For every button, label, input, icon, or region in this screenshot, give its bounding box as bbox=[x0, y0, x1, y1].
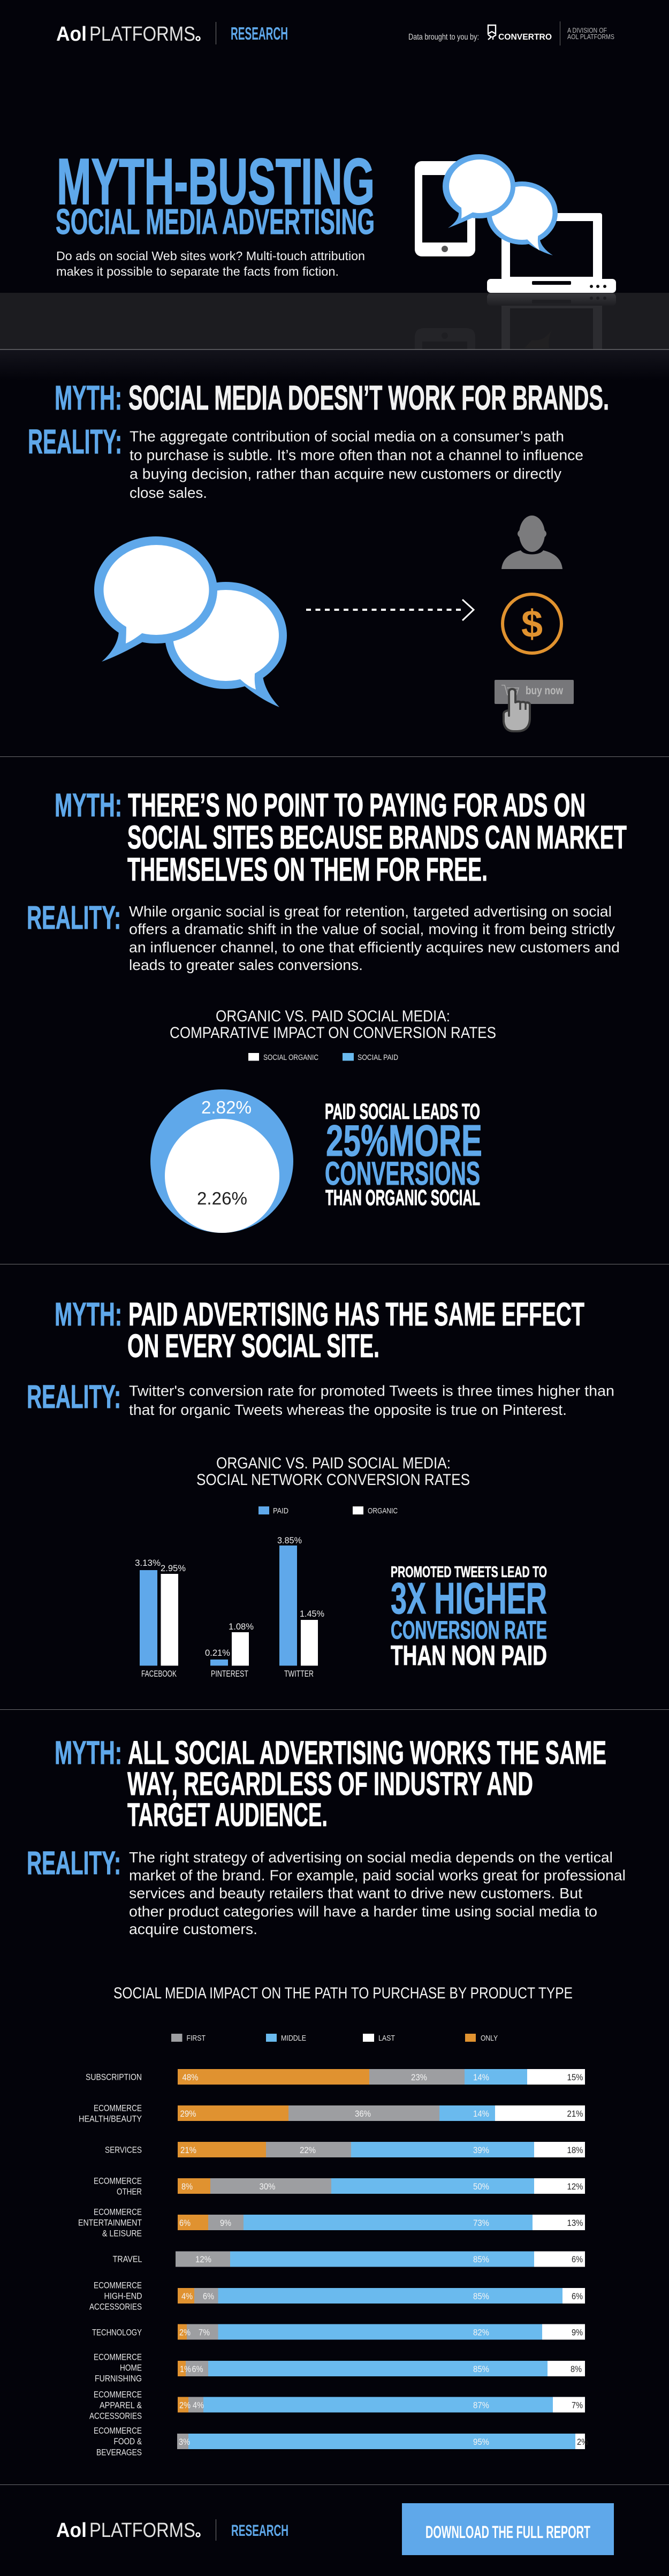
row: home furnishing: FURNISHING bbox=[95, 2374, 142, 2383]
group: pinterest: 0.21% bbox=[205, 1648, 230, 1658]
legend: FIRST bbox=[186, 2034, 206, 2043]
row: travel: TRAVEL bbox=[112, 2254, 142, 2264]
row: subscription: SUBSCRIPTION bbox=[86, 2072, 142, 2082]
row: high-end accessories bbox=[89, 2280, 585, 2312]
row: ecommerce other: 30% bbox=[259, 2181, 275, 2192]
row: travel: 6% bbox=[572, 2254, 583, 2264]
icon: dollar coin bbox=[503, 594, 561, 653]
chart: nested circles: 2.82% bbox=[201, 1097, 252, 1117]
arrow: dotted bbox=[306, 600, 474, 620]
icon: person bbox=[501, 516, 562, 569]
row: high-end accessories: ECOMMERCE bbox=[94, 2280, 142, 2290]
division note: AOL PLATFORMS bbox=[567, 33, 614, 41]
logo: Aol Platforms: PLATFORMS bbox=[89, 2519, 195, 2542]
icon: buy now button bbox=[495, 680, 574, 731]
research label: RESEARCH bbox=[231, 2522, 288, 2540]
row: home furnishing: 8% bbox=[571, 2364, 582, 2374]
panel: myth 4 bbox=[27, 1734, 626, 2457]
reality 3 text: Twitter's conversion rate for promoted Tweets is three times higher than bbox=[129, 1382, 614, 1399]
row: home furnishing: 6% bbox=[192, 2364, 203, 2374]
legend: SOCIAL ORGANIC bbox=[263, 1053, 318, 1062]
icon: dollar coin: $ bbox=[521, 603, 543, 646]
legend: SOCIAL PAID bbox=[358, 1053, 398, 1062]
reality 4 text: REALITY: bbox=[27, 1845, 121, 1881]
group: twitter: 1.45% bbox=[300, 1609, 324, 1619]
chart title bbox=[170, 1007, 496, 1042]
legend: ORGANIC bbox=[368, 1506, 398, 1516]
row: food and beverages: FOOD & bbox=[113, 2436, 142, 2446]
chart title: SOCIAL NETWORK CONVERSION RATES bbox=[196, 1471, 470, 1489]
row: high-end accessories: 4% bbox=[181, 2291, 193, 2301]
row: food and beverages: 2% bbox=[577, 2437, 588, 2447]
row: ecommerce other bbox=[94, 2176, 585, 2197]
group: facebook: 3.13% bbox=[135, 1558, 161, 1568]
row: technology: 9% bbox=[572, 2328, 583, 2337]
group: facebook: 2.95% bbox=[161, 1563, 186, 1573]
title bbox=[56, 145, 375, 242]
legend bbox=[259, 1506, 398, 1516]
reality 1 text: close sales. bbox=[130, 484, 207, 501]
myth 3 heading: MYTH: bbox=[55, 1296, 122, 1332]
row: technology: 7% bbox=[199, 2328, 210, 2337]
chart title: SOCIAL MEDIA IMPACT ON THE PATH TO PURCHASE BY PRODUCT TYPE bbox=[113, 1984, 573, 2002]
panel: myth 2 bbox=[27, 787, 627, 1233]
callout: paid social: PAID SOCIAL LEADS TO bbox=[325, 1099, 480, 1124]
row: travel: 12% bbox=[195, 2254, 211, 2264]
icon: laptop bbox=[487, 213, 616, 293]
row: entertainment and leisure: ENTERTAINMENT bbox=[78, 2217, 142, 2228]
legend: PAID bbox=[273, 1506, 288, 1516]
row: apparel and accessories: ECOMMERCE bbox=[94, 2390, 142, 2399]
logo: Aol Platforms: PLATFORMS bbox=[89, 23, 195, 46]
row: services: 18% bbox=[567, 2145, 583, 2155]
reality 2 text: offers a dramatic shift in the value of social, moving it from being strictly bbox=[129, 921, 615, 937]
icon: large speech bubbles bbox=[94, 536, 287, 707]
reality 4 text: market of the brand. For example, paid social works great for professional bbox=[129, 1867, 626, 1883]
divider line bbox=[0, 2484, 669, 2485]
logo: Convertro: CONVERTRO bbox=[498, 33, 552, 42]
reality 2 text: an influencer channel, to one that efficiently acquires new customers and bbox=[129, 939, 620, 956]
row: apparel and accessories: 2% bbox=[179, 2400, 191, 2410]
title: MYTH-BUSTING bbox=[57, 145, 375, 218]
download button bbox=[402, 2503, 614, 2555]
callout: promoted tweets: 3X HIGHER bbox=[391, 1573, 547, 1623]
chart title: COMPARATIVE IMPACT ON CONVERSION RATES bbox=[170, 1024, 496, 1042]
row: food and beverages: BEVERAGES bbox=[96, 2448, 142, 2457]
row: health and beauty: 36% bbox=[355, 2109, 371, 2119]
icon: speech bubble right bbox=[486, 181, 558, 255]
reality 2 text: leads to greater sales conversions. bbox=[129, 957, 363, 973]
myth 4 heading: MYTH: bbox=[55, 1734, 122, 1771]
row: apparel and accessories bbox=[89, 2390, 585, 2421]
row: home furnishing: 85% bbox=[473, 2364, 489, 2374]
row: entertainment and leisure: ECOMMERCE bbox=[94, 2207, 142, 2217]
myth 2 heading bbox=[55, 787, 627, 888]
row: technology: 2% bbox=[179, 2328, 191, 2337]
reality 1 text bbox=[28, 422, 583, 501]
intro text bbox=[56, 249, 365, 278]
row: home furnishing: ECOMMERCE bbox=[94, 2352, 142, 2362]
reality 1 text: The aggregate contribution of social media on a consumer’s path bbox=[130, 428, 564, 444]
row: subscription: 48% bbox=[182, 2072, 198, 2082]
data credit: Data brought to you by: bbox=[408, 33, 479, 42]
reality 3 text: REALITY: bbox=[27, 1378, 121, 1415]
icon: pointing hand bbox=[504, 689, 530, 731]
row: home furnishing: 1% bbox=[180, 2364, 191, 2374]
icon: phone bbox=[415, 161, 475, 256]
group: twitter: TWITTER bbox=[284, 1669, 314, 1679]
group: facebook: FACEBOOK bbox=[141, 1669, 177, 1679]
row: high-end accessories: 85% bbox=[473, 2291, 489, 2301]
group: twitter bbox=[277, 1535, 324, 1679]
row: health and beauty: ECOMMERCE bbox=[94, 2103, 142, 2113]
intro text: Do ads on social Web sites work? Multi-touch attribution bbox=[56, 249, 365, 263]
row: entertainment and leisure: 9% bbox=[220, 2218, 231, 2228]
myth 4 heading bbox=[55, 1734, 606, 1833]
row: services: 39% bbox=[473, 2145, 489, 2155]
intro text: makes it possible to separate the facts from fiction. bbox=[56, 264, 339, 278]
myth 3 heading: ON EVERY SOCIAL SITE. bbox=[127, 1328, 379, 1364]
chart: nested circles bbox=[150, 1089, 293, 1233]
row: travel bbox=[112, 2252, 585, 2267]
row: health and beauty: 21% bbox=[567, 2109, 583, 2119]
reality 2 text: While organic social is great for retention, targeted advertising on social bbox=[129, 903, 612, 920]
division note: A DIVISION OF bbox=[567, 26, 607, 34]
reality 4 text: services and beauty retailers that want to drive new customers. But bbox=[129, 1885, 582, 1901]
bar chart: network conversion rates bbox=[135, 1535, 324, 1679]
group: twitter: 3.85% bbox=[277, 1535, 302, 1545]
row: subscription: 14% bbox=[473, 2072, 489, 2082]
row: apparel and accessories: APPAREL & bbox=[100, 2400, 142, 2410]
row: subscription: 23% bbox=[411, 2072, 427, 2082]
row: services: 21% bbox=[180, 2145, 196, 2155]
myth 2 heading: MYTH: bbox=[55, 787, 122, 823]
panel: myth 1 bbox=[28, 378, 609, 731]
row: high-end accessories: ACCESSORIES bbox=[89, 2302, 142, 2312]
chart title bbox=[196, 1454, 470, 1489]
header: logos bbox=[56, 21, 614, 46]
callout: paid social bbox=[325, 1099, 482, 1210]
row: ecommerce other: ECOMMERCE bbox=[94, 2176, 142, 2186]
callout: promoted tweets: PROMOTED TWEETS LEAD TO bbox=[391, 1564, 547, 1581]
row: home furnishing: HOME bbox=[120, 2363, 142, 2373]
reality 1 text: to purchase is subtle. It’s more often than not a channel to influence bbox=[130, 446, 583, 464]
stacked bar chart bbox=[78, 2069, 588, 2457]
row: health and beauty bbox=[79, 2103, 585, 2124]
logo: Aol Platforms: Aol bbox=[56, 2519, 87, 2542]
logo: Convertro bbox=[488, 25, 552, 42]
row: food and beverages: 95% bbox=[473, 2437, 489, 2447]
panel: myth 3 bbox=[27, 1296, 614, 1679]
reality 4 text: acquire customers. bbox=[129, 1921, 257, 1937]
row: travel: 85% bbox=[473, 2254, 489, 2264]
reality 2 text bbox=[27, 899, 620, 973]
legend: LAST bbox=[378, 2034, 395, 2043]
group: facebook bbox=[135, 1558, 186, 1679]
reality 1 text: a buying decision, rather than acquire new customers or directly bbox=[130, 466, 561, 482]
row: high-end accessories: 6% bbox=[203, 2291, 214, 2301]
reality 4 text: The right strategy of advertising on social media depends on the vertical bbox=[129, 1849, 613, 1866]
logo: Aol Platforms: Aol bbox=[56, 23, 87, 46]
callout: paid social: 25%MORE bbox=[326, 1116, 482, 1165]
row: technology: TECHNOLOGY bbox=[92, 2328, 142, 2337]
myth 1 heading: MYTH: bbox=[55, 378, 122, 417]
myth 4 heading: TARGET AUDIENCE. bbox=[127, 1797, 328, 1833]
row: apparel and accessories: 7% bbox=[572, 2400, 583, 2410]
row: entertainment and leisure: 13% bbox=[567, 2218, 583, 2228]
row: food and beverages bbox=[94, 2426, 588, 2457]
row: ecommerce other: OTHER bbox=[117, 2186, 142, 2197]
reality 1 text: REALITY: bbox=[28, 422, 122, 461]
group: pinterest bbox=[205, 1622, 254, 1679]
group: pinterest: 1.08% bbox=[229, 1622, 254, 1632]
row: entertainment and leisure bbox=[78, 2207, 585, 2239]
chart: nested circles: 2.26% bbox=[197, 1188, 247, 1208]
myth 3 heading bbox=[55, 1296, 584, 1364]
row: services bbox=[105, 2142, 585, 2157]
row: technology: 82% bbox=[473, 2328, 489, 2337]
row: apparel and accessories: 4% bbox=[193, 2400, 204, 2410]
panel: floor reflection band bbox=[0, 293, 669, 380]
row: technology bbox=[92, 2324, 585, 2339]
callout: promoted tweets bbox=[391, 1564, 547, 1671]
group: pinterest: PINTEREST bbox=[211, 1669, 248, 1679]
row: food and beverages: 3% bbox=[179, 2437, 190, 2447]
row: subscription bbox=[86, 2069, 585, 2085]
icon: devices with speech bubbles bbox=[415, 154, 616, 293]
footer bbox=[56, 2503, 614, 2555]
legend: MIDDLE bbox=[281, 2034, 306, 2043]
callout: paid social: CONVERSIONS bbox=[325, 1155, 480, 1192]
chart title: ORGANIC VS. PAID SOCIAL MEDIA: bbox=[216, 1454, 451, 1472]
row: services: SERVICES bbox=[105, 2145, 142, 2155]
legend bbox=[248, 1053, 398, 1062]
row: apparel and accessories: ACCESSORIES bbox=[89, 2411, 142, 2421]
row: entertainment and leisure: 73% bbox=[473, 2218, 489, 2228]
row: subscription: 15% bbox=[567, 2072, 583, 2082]
reality 2 text: REALITY: bbox=[27, 899, 121, 936]
row: ecommerce other: 50% bbox=[473, 2181, 489, 2192]
row: health and beauty: 29% bbox=[180, 2109, 196, 2119]
reality 4 text bbox=[27, 1845, 626, 1937]
legend: ONLY bbox=[481, 2034, 498, 2043]
divider line bbox=[0, 756, 669, 757]
legend bbox=[171, 2034, 498, 2043]
row: health and beauty: 14% bbox=[473, 2109, 489, 2119]
reality 4 text: other product categories will have a harder time using social media to bbox=[129, 1903, 597, 1920]
row: high-end accessories: 6% bbox=[572, 2291, 583, 2301]
row: services: 22% bbox=[300, 2145, 316, 2155]
callout: promoted tweets: CONVERSION RATE bbox=[391, 1616, 547, 1644]
callout: promoted tweets: THAN NON PAID bbox=[391, 1640, 547, 1671]
callout: paid social: THAN ORGANIC SOCIAL bbox=[325, 1185, 480, 1210]
division note bbox=[567, 26, 614, 41]
reality 3 text bbox=[27, 1378, 614, 1418]
icon: speech bubble left bbox=[443, 154, 515, 228]
row: entertainment and leisure: 6% bbox=[179, 2218, 191, 2228]
row: health and beauty: HEALTH/BEAUTY bbox=[79, 2113, 142, 2124]
row: ecommerce other: 12% bbox=[567, 2181, 583, 2192]
row: high-end accessories: HIGH-END bbox=[104, 2291, 142, 2301]
reality 3 text: that for organic Tweets whereas the opposite is true on Pinterest. bbox=[129, 1401, 567, 1418]
chart title: ORGANIC VS. PAID SOCIAL MEDIA: bbox=[216, 1007, 450, 1025]
row: home furnishing bbox=[94, 2352, 585, 2383]
row: ecommerce other: 8% bbox=[181, 2181, 193, 2192]
icon: buy now button: buy now bbox=[526, 685, 564, 697]
row: entertainment and leisure: & LEISURE bbox=[102, 2228, 142, 2239]
row: food and beverages: ECOMMERCE bbox=[94, 2426, 142, 2436]
title: SOCIAL MEDIA ADVERTISING bbox=[56, 202, 375, 242]
row: apparel and accessories: 87% bbox=[473, 2400, 489, 2410]
research label: RESEARCH bbox=[231, 24, 288, 43]
divider line bbox=[0, 1709, 669, 1710]
